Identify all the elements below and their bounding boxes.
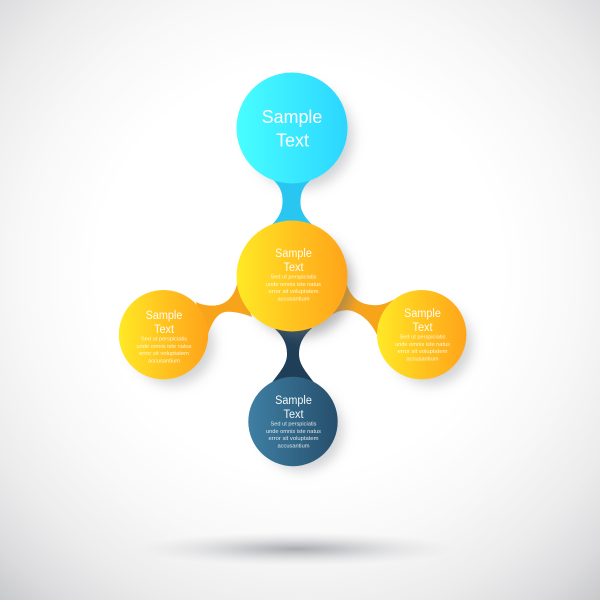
ground shadow [136,532,456,566]
text: left node: accusantium [148,358,180,364]
text: bottom node: error sit voluptatem [268,436,319,442]
node: bottom navy circle [248,377,338,466]
node: right yellow circle [377,290,466,379]
text: left node: Sed ut perspiciatis [141,336,187,342]
text: centre node: accusantium [278,296,310,302]
connector: left orange [196,280,252,340]
text: right node: unde omnis iste natus [395,342,450,348]
heading: top node: Sample [262,107,322,127]
text: bottom node: unde omnis iste natus [266,429,321,435]
text: centre node: unde omnis iste natus [266,282,321,288]
connector: right orange [331,282,393,342]
text: bottom node: Sed ut perspiciatis [270,422,317,428]
text: left node: Sample [146,310,182,322]
text: right node: Sed ut perspiciatis [400,334,446,340]
node: centre yellow circle [236,220,348,332]
text: left node: unde omnis iste natus [136,344,192,350]
text: right node: Text [412,322,433,334]
text: bottom node: Sample [275,395,312,407]
text: centre node: error sit voluptatem [268,289,319,295]
shadow: centre node [249,233,353,337]
shadows: node drop shadows [132,85,472,471]
text: right node [395,308,450,362]
text: left node: error sit voluptatem [139,351,189,357]
connector: bottom navy [270,328,316,385]
text: centre node [266,248,321,302]
text: centre node: Sample [275,248,312,260]
text: right node: accusantium [406,356,439,362]
text: centre node: Text [284,262,304,274]
connector: top cyan [264,179,320,232]
text: left node [136,310,192,364]
text: bottom node [266,395,321,450]
text: bottom node: Text [284,409,304,421]
node: top cyan circle [236,72,348,184]
node: left yellow circle [119,290,208,379]
text: centre node: Sed ut perspiciatis [270,274,317,280]
text: right node: Sample [404,308,441,320]
text: right node: error sit voluptatem [398,349,448,355]
text: left node: Text [154,324,175,336]
node: top cyan circle: Text [276,130,309,150]
text: bottom node: accusantium [278,444,310,450]
